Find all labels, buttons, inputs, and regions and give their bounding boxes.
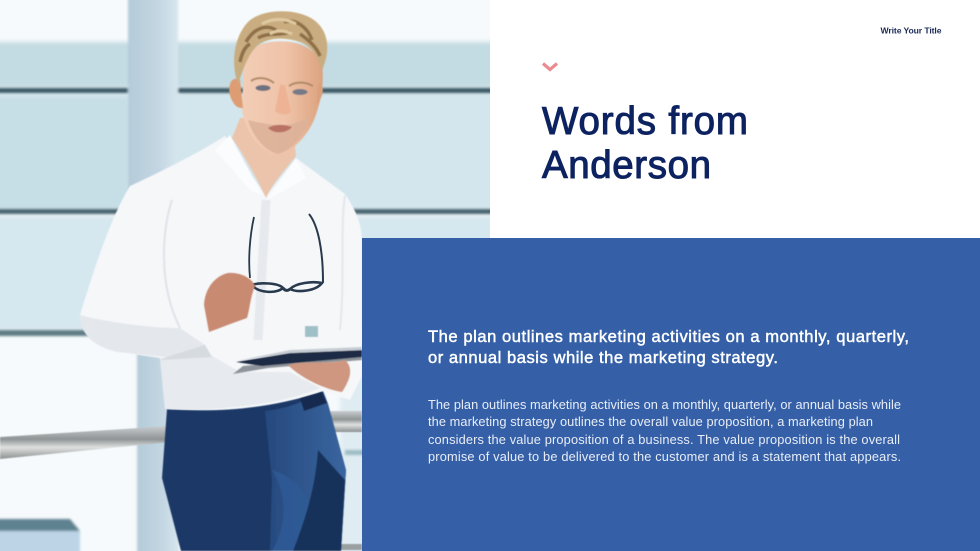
body text xyxy=(428,397,901,464)
trousers xyxy=(162,391,346,551)
title: Words from xyxy=(542,100,748,143)
railing right xyxy=(330,411,362,432)
person xyxy=(80,11,362,551)
body text: promise of value to be delivered to the customer and is a statement that appears. xyxy=(428,449,901,464)
hand holding glasses xyxy=(204,273,255,332)
body text: The plan outlines marketing activities on a monthly, quarterly, or annual basis while xyxy=(428,397,901,412)
header label: Write Your Title xyxy=(880,26,942,36)
shirt xyxy=(80,135,362,410)
icon: pink chevron xyxy=(543,64,557,70)
title: Anderson xyxy=(542,144,711,187)
hair xyxy=(234,11,327,84)
photo background: office windows xyxy=(0,0,500,551)
railing left xyxy=(0,426,170,459)
subheading xyxy=(428,327,909,367)
face xyxy=(229,41,323,155)
panel: blue text panel xyxy=(362,238,980,551)
body text: the marketing strategy outlines the overall value proposition, a marketing plan xyxy=(428,414,873,429)
title xyxy=(542,100,748,187)
tablet xyxy=(233,347,362,374)
glasses xyxy=(249,214,323,292)
body text: considers the value proposition of a business. The value proposition is the overall xyxy=(428,432,900,447)
subheading: The plan outlines marketing activities on a monthly, quarterly, xyxy=(428,327,909,346)
hand holding tablet xyxy=(288,360,350,392)
neck xyxy=(232,118,296,198)
subheading: or annual basis while the marketing strategy. xyxy=(428,348,778,367)
photo: man holding glasses and tablet xyxy=(0,0,500,551)
